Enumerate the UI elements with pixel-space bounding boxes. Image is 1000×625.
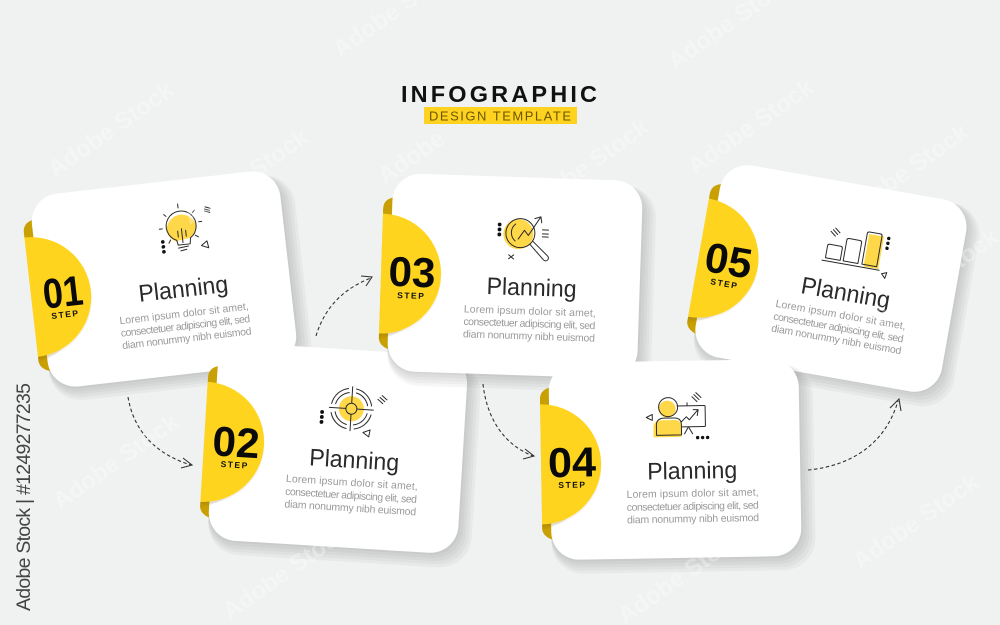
body text (627, 487, 759, 526)
heading: Planning (308, 444, 400, 477)
panel: step 4 (539, 359, 816, 574)
card surface (29, 168, 299, 390)
step label: STEP (220, 459, 249, 471)
text: Adobe Stock (683, 73, 819, 180)
heading: Planning (647, 457, 737, 485)
card surface (691, 161, 971, 396)
step label: STEP (558, 480, 587, 490)
heading: Planning (137, 271, 230, 308)
text: Adobe Stock (838, 118, 974, 225)
card surface (387, 173, 643, 379)
body text: diam nonummy nibh euismod (770, 322, 903, 357)
fold tabs (685, 182, 724, 335)
panel: step 2 (197, 341, 483, 569)
card shadow (29, 172, 315, 403)
subtitle banner: DESIGN TEMPLATE (429, 108, 571, 124)
badge shadow (200, 383, 268, 511)
panel: step 5 (680, 159, 985, 411)
icon: bar chart (821, 225, 893, 279)
step number: 04 (548, 438, 597, 486)
text: Adobe Stock (218, 518, 354, 625)
body text (463, 303, 596, 345)
badge shadow (25, 232, 99, 363)
panel: step 1 (20, 167, 315, 404)
body text (119, 301, 252, 352)
body text: consectetuer adipiscing elit, sed (463, 316, 596, 332)
badge shadow (540, 404, 603, 530)
body text: diam nonummy nibh euismod (463, 328, 595, 345)
heading: Planning (486, 273, 577, 303)
body text (770, 298, 907, 357)
text: Adobe Stock (868, 223, 1000, 330)
step badge (688, 199, 768, 327)
step number: 05 (701, 233, 756, 288)
body text: Lorem ipsum dolor sit amet, (286, 473, 418, 493)
arrow: step 4 to 5 (808, 399, 901, 470)
badge shadow (687, 200, 768, 333)
step label: STEP (710, 276, 739, 291)
card shadow (548, 364, 816, 574)
text: Adobe (373, 125, 450, 190)
body text: Lorem ipsum dolor sit amet, (464, 303, 596, 320)
text: Adobe Stock (43, 76, 179, 183)
card surface (207, 342, 469, 554)
card shadow (689, 163, 984, 411)
title: INFOGRAPHIC (401, 81, 597, 107)
card shadow (206, 347, 482, 569)
fold tabs (378, 197, 396, 350)
step badge (200, 382, 268, 505)
body text: Lorem ipsum dolor sit amet, (119, 301, 249, 327)
step number: 01 (40, 266, 85, 318)
body text: consectetuer adipiscing elit, sed (120, 313, 251, 340)
icon: magnifier with chart (497, 215, 550, 261)
text: Adobe Stock (848, 468, 984, 575)
fold tabs (540, 387, 554, 540)
body text (284, 473, 418, 518)
step number: 03 (388, 248, 436, 296)
body text: consectetuer adipiscing elit, sed (627, 500, 759, 514)
body text: diam nonummy nibh euismod (122, 325, 252, 352)
fold tabs (22, 219, 52, 373)
panel: step 3 (377, 173, 657, 394)
body text: consectetuer adipiscing elit, sed (772, 311, 905, 345)
text: Adobe Stock (518, 113, 654, 220)
icon: presenter with board (646, 392, 709, 440)
step label: STEP (51, 308, 80, 321)
badge shadow (379, 215, 443, 342)
body text: Lorem ipsum dolor sit amet, (627, 487, 759, 501)
step badge (24, 231, 98, 357)
body text: Lorem ipsum dolor sit amet, (775, 298, 907, 333)
arrow: step 2 to 3 (316, 276, 372, 336)
text: Adobe Stock (48, 408, 184, 515)
title (401, 81, 597, 124)
arrow: step 1 to 2 (128, 397, 192, 468)
icon: target (319, 385, 388, 438)
step badge (379, 214, 443, 336)
body text: consectetuer adipiscing elit, sed (285, 486, 417, 506)
text: Adobe Stock (178, 123, 314, 230)
body text: diam nonummy nibh euismod (627, 512, 759, 526)
stock credit: Adobe Stock | #1249277235 (13, 383, 35, 611)
step label: STEP (397, 290, 426, 301)
card surface (548, 359, 802, 560)
card shadow (386, 178, 657, 394)
step number: 02 (211, 417, 261, 467)
fold tabs (199, 365, 221, 518)
heading: Planning (799, 272, 892, 314)
arrow: step 3 to 4 (483, 384, 534, 459)
icon: light bulb (157, 200, 215, 254)
step badge (540, 403, 602, 524)
body text: diam nonummy nibh euismod (284, 498, 417, 518)
